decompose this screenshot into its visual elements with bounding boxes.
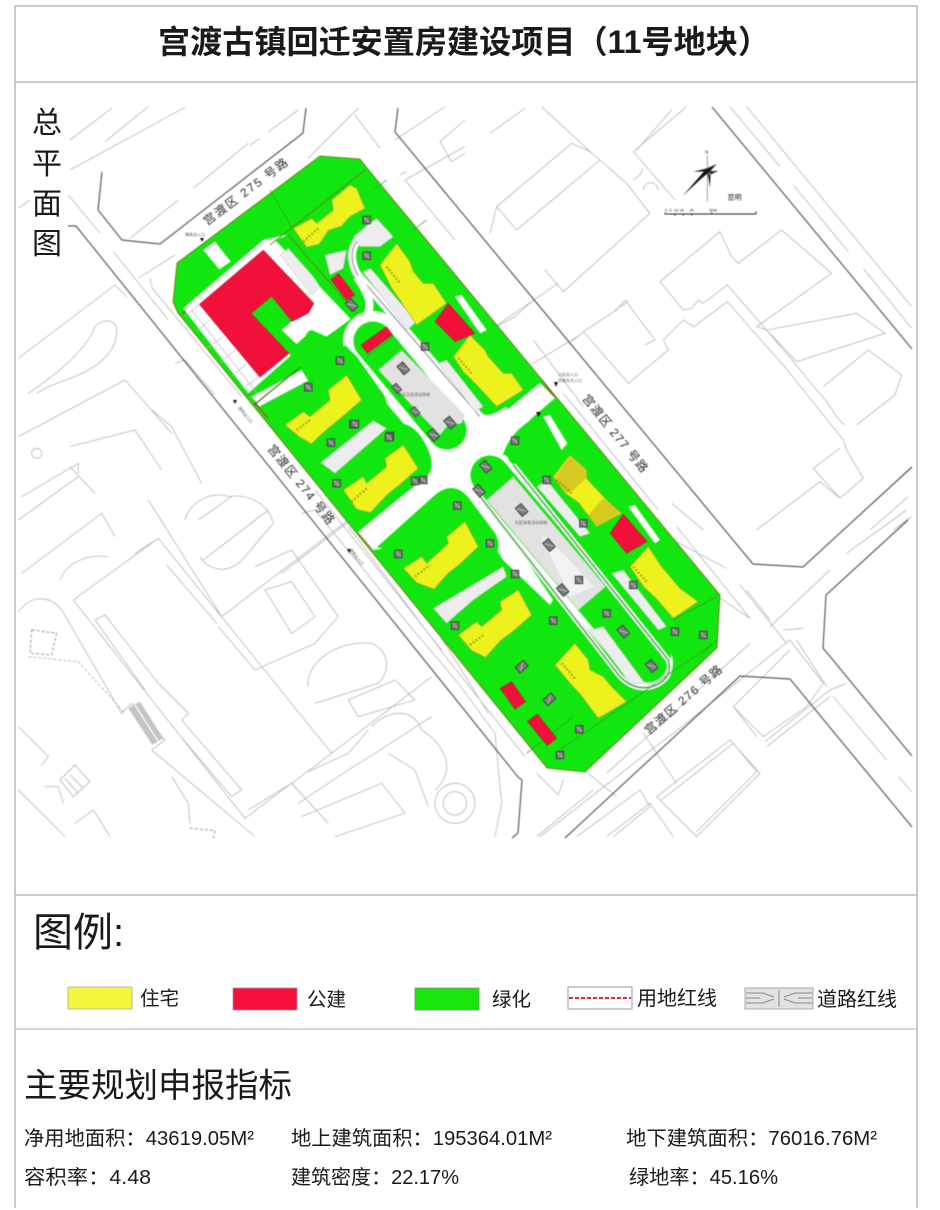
parking blocks (305, 216, 456, 487)
green survey lines (270, 180, 427, 357)
road label 276: 宫渡区 276 号路 (641, 662, 725, 737)
entrance labels: 建筑出入口 (237, 405, 254, 424)
yellow building 10 (553, 455, 622, 527)
parking blocks (351, 420, 707, 759)
plaza labels (398, 391, 547, 525)
island: lower U (490, 475, 648, 663)
yellow building 8 (555, 643, 627, 718)
lower half paving, plazas and buildings (351, 415, 717, 759)
island: block C (376, 487, 500, 551)
legend (68, 987, 897, 1011)
side label: 总平面图: 总 (32, 107, 62, 140)
plot ratio: 容积率：4.48 (24, 1166, 151, 1189)
surrounding context linework: south-west (18, 477, 525, 838)
yellow building 3 (453, 335, 523, 407)
legend: public: 公建 (307, 989, 346, 1011)
green survey lines (527, 597, 717, 753)
khaki hatched roof (555, 456, 586, 493)
surrounding context linework: north-west (18, 107, 465, 497)
lower U road (490, 475, 648, 663)
hatched loading strip (280, 248, 320, 295)
indicators (24, 1127, 877, 1189)
road boundary lines (68, 107, 912, 838)
island: block D (503, 419, 680, 665)
legend: greening (415, 988, 531, 1011)
legend: residential: 住宅 (140, 988, 179, 1010)
below ground area: 地下建筑面积：76016.76M² (626, 1127, 877, 1150)
roads and internal paving (358, 341, 648, 663)
red building lower 2 (527, 714, 557, 746)
indicators heading: 主要规划申报指标 (24, 1068, 292, 1105)
U road outer lane (475, 465, 669, 688)
white bar (252, 370, 308, 407)
net land area: 净用地面积：43619.05M² (24, 1127, 254, 1150)
side label: 总平面图: 面 (32, 188, 62, 221)
island: upper capsule (373, 341, 447, 430)
white plaza strip (282, 322, 307, 344)
yellow building 7 (458, 590, 532, 657)
green strip (275, 235, 357, 320)
red building upper right (435, 303, 475, 342)
hatched paving (433, 567, 507, 623)
plaza 1 (378, 350, 465, 435)
red building top (331, 273, 355, 300)
yellow building 4 (285, 375, 362, 444)
yellow building 2 (380, 243, 447, 325)
north arrow and scale: N (705, 149, 708, 154)
white plot (183, 235, 352, 393)
building window marks (297, 228, 472, 502)
green islands (290, 341, 680, 665)
legend: site boundary (568, 987, 717, 1010)
legend: public (233, 988, 346, 1011)
site base green (173, 156, 720, 772)
surrounding context linework: north-east (490, 107, 912, 530)
site inner line (270, 170, 365, 313)
white bars (543, 415, 567, 450)
yellow building 6 (403, 522, 478, 589)
island: block B (404, 423, 432, 492)
upper lanes (352, 223, 508, 419)
green bar in entry (390, 512, 432, 537)
green ratio: 绿地率：45.16% (629, 1166, 778, 1189)
north arrow and scale: 0 5 10 15 25 50M (665, 207, 717, 212)
building density: 建筑密度：22.17% (291, 1166, 459, 1189)
legend heading: 图例: (33, 911, 124, 955)
upper half paving, plazas and buildings (270, 170, 523, 513)
hatched paving (325, 250, 347, 275)
title: 宫渡古镇回迁安置房建设项目（11号地块） (158, 24, 770, 60)
side label: 总平面图: 平 (32, 148, 62, 181)
upper capsule road (373, 341, 450, 432)
island: block A (342, 344, 388, 404)
intersection fill (428, 420, 530, 492)
plaza labels: 社区体育活动场地 (515, 519, 547, 525)
red building middle (361, 327, 392, 353)
yellow building 5 (343, 445, 418, 513)
red main building (199, 250, 314, 377)
courtyard green (251, 296, 312, 356)
white bar (455, 295, 487, 333)
red building lower 1 (500, 682, 526, 709)
parking grid lines (185, 304, 260, 397)
surrounding context linework: south-east (537, 510, 912, 837)
legend: residential (68, 987, 179, 1010)
legend: greening: 绿化 (492, 989, 531, 1011)
north arrow and scale (665, 149, 756, 216)
road label 275: 宫渡区 275 号路 (200, 155, 291, 228)
entrance labels: 建筑出入口 (185, 231, 205, 237)
legend: site boundary: 用地红线 (637, 987, 717, 1010)
road label 277: 宫渡区 277 号路 (579, 391, 652, 475)
site plan map (18, 107, 912, 838)
plaza 2 (487, 477, 606, 610)
legend: road boundary (745, 988, 897, 1011)
dark green line (254, 367, 300, 405)
building window marks (415, 480, 647, 678)
side label: 总平面图 (32, 107, 62, 261)
yellow building 9 (630, 547, 698, 618)
yellow building 1 (293, 185, 365, 247)
cross road (358, 383, 555, 550)
plaza labels: 社区文化活动场地 (398, 391, 430, 397)
entrance labels: 市政车位入口 (558, 377, 582, 383)
entrance labels: 小区出入口 (558, 371, 578, 377)
white plot with community building (183, 235, 357, 407)
north arrow and scale: 昆明 (728, 193, 742, 201)
white driveway (203, 242, 231, 269)
entrance labels: 建筑出入口 (348, 547, 365, 566)
road label 274: 宫渡区 274 号路 (265, 441, 338, 527)
entrance labels (185, 231, 582, 566)
green lower band (248, 319, 350, 404)
side label: 总平面图: 图 (32, 228, 62, 261)
site boundary red line (181, 310, 556, 551)
above ground area: 地上建筑面积：195364.01M² (291, 1127, 552, 1150)
red building right (610, 514, 647, 553)
legend: road boundary: 道路红线 (817, 988, 897, 1011)
